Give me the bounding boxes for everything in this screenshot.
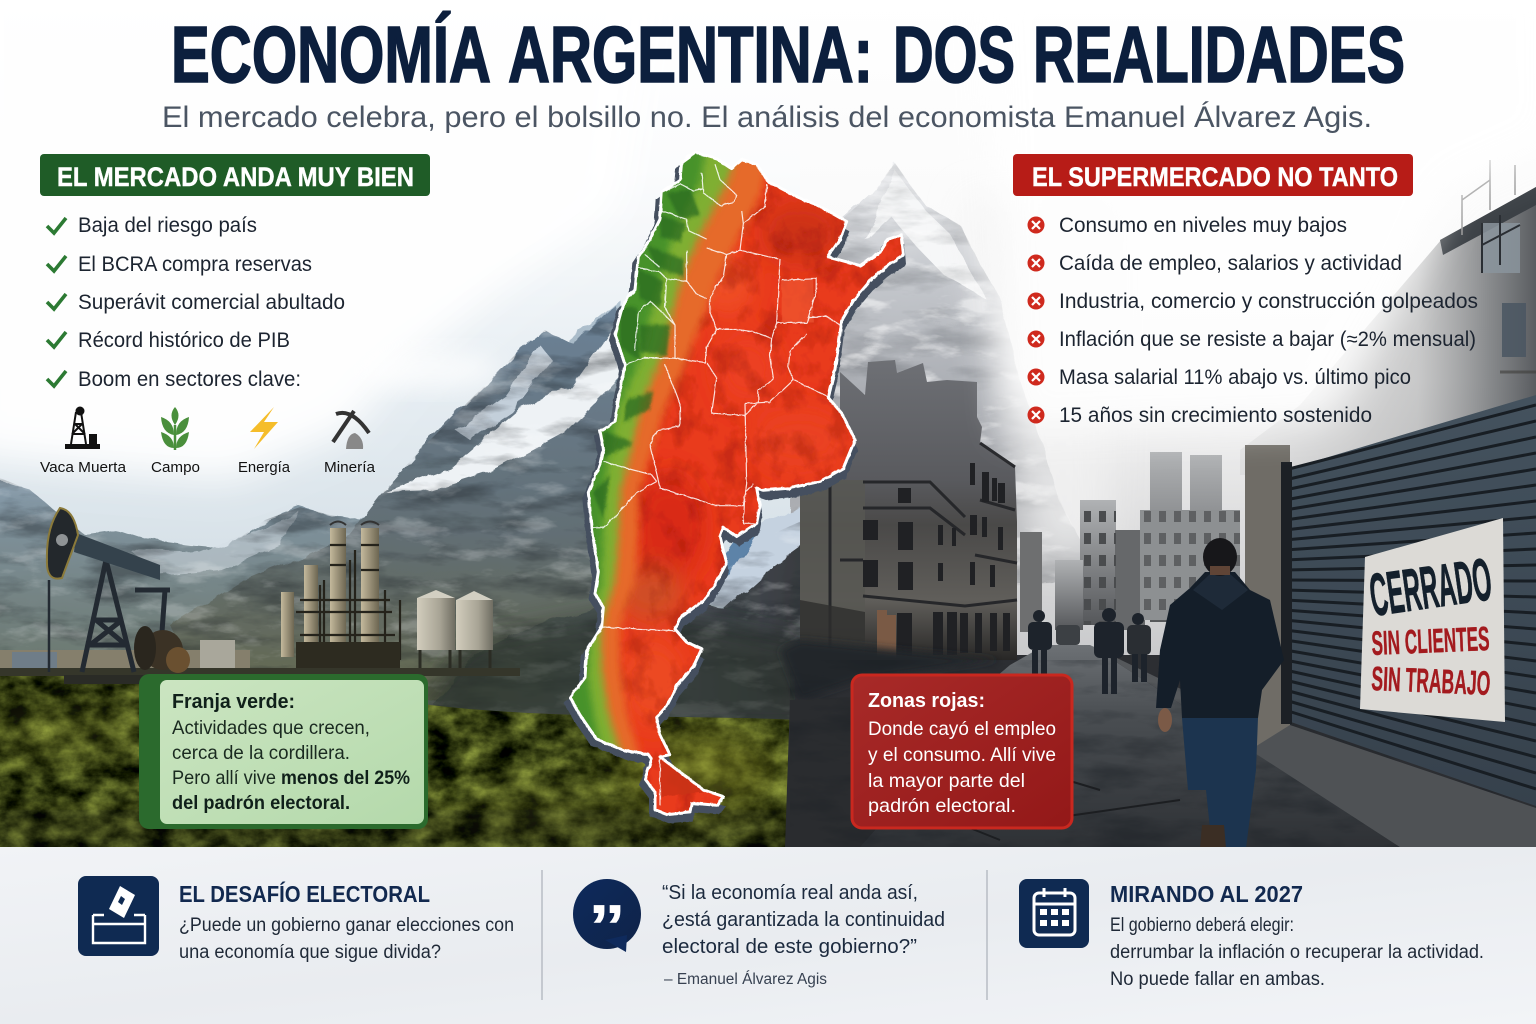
icon: quote bubble: ” xyxy=(588,893,626,962)
callout: zonas rojas: la mayor parte del xyxy=(868,770,1025,792)
heading: el mercado: EL MERCADO ANDA MUY BIEN xyxy=(57,162,414,192)
map of Argentina xyxy=(560,140,920,845)
distant buildings xyxy=(1020,452,1240,632)
map fill xyxy=(572,154,902,814)
item: masa salarial: Masa salarial 11% abajo vs. último pico xyxy=(1059,366,1411,389)
panel: market list xyxy=(40,154,430,476)
quote text: ¿está garantizada la continuidad xyxy=(662,909,945,931)
background scene xyxy=(0,160,1536,847)
text: desafío electoral: una economía que sigue divida? xyxy=(179,942,441,963)
callout: franja verde: menos del 25% xyxy=(281,767,410,789)
right peak xyxy=(790,163,1100,600)
olive ground xyxy=(0,676,790,847)
shutter wall xyxy=(1245,395,1536,847)
map outline xyxy=(570,152,903,814)
text: desafío electoral xyxy=(179,880,514,963)
lower slope shade xyxy=(400,610,810,730)
peak texture xyxy=(834,164,1075,585)
title xyxy=(171,10,1405,99)
city dark base xyxy=(795,655,1536,847)
callout: zonas rojas: y el consumo. Allí vive xyxy=(868,744,1056,766)
panel: supermarket list xyxy=(1013,154,1478,427)
item: BCRA: El BCRA compra reservas xyxy=(78,253,312,276)
street xyxy=(795,645,1400,847)
distant industrial buildings xyxy=(0,640,520,676)
item: riesgo país: Baja del riesgo país xyxy=(78,214,257,237)
cerrado sign xyxy=(1360,518,1505,722)
footer panel xyxy=(0,847,1536,1024)
icon: minería xyxy=(324,411,376,476)
icon: campo: Campo xyxy=(151,459,200,476)
text: mirando al 2027: MIRANDO AL 2027 xyxy=(1110,881,1303,907)
quote text: – Emanuel Álvarez Agis xyxy=(664,971,827,988)
item: empleo: Caída de empleo, salarios y actividad xyxy=(1059,252,1402,275)
main ruined building xyxy=(780,360,1017,700)
callout: franja verde: Franja verde: xyxy=(172,691,295,713)
title: ECONOMÍA xyxy=(171,10,491,99)
left far mountains xyxy=(0,300,640,720)
item: inflación: Inflación que se resiste a bajar (≈2% mensual) xyxy=(1059,328,1476,351)
callout: zonas rojas: Zonas rojas: xyxy=(868,690,985,712)
heading: el supermercado: EL SUPERMERCADO NO TANTO xyxy=(1032,162,1398,192)
text: mirando al 2027: El gobierno deberá elegir: xyxy=(1110,915,1294,936)
icon: campo xyxy=(151,407,200,476)
pumpjack xyxy=(47,508,190,684)
callout: franja verde: Actividades que crecen, xyxy=(172,717,370,739)
heading: el mercado xyxy=(40,154,430,196)
quote text xyxy=(662,882,945,988)
icon: quote bubble xyxy=(573,879,641,962)
item: PIB: Récord histórico de PIB xyxy=(78,329,290,352)
text: mirando al 2027: derrumbar la inflación o recuperar la actividad. xyxy=(1110,942,1484,963)
item: crecimiento: 15 años sin crecimiento sostenido xyxy=(1059,404,1372,427)
upper right building xyxy=(1240,160,1536,475)
icon: vaca muerta xyxy=(40,406,127,476)
icon: ballot box xyxy=(78,876,159,956)
icon: energía xyxy=(238,407,291,476)
main mountain range xyxy=(170,305,680,720)
text: desafío electoral: EL DESAFÍO ELECTORAL xyxy=(179,880,430,907)
callout: franja verde: cerca de la cordillera. xyxy=(172,742,350,764)
callout: zonas rojas: Donde cayó el empleo xyxy=(868,718,1056,740)
list haze right xyxy=(985,0,1536,430)
callout: franja verde: Pero allí vive xyxy=(172,767,276,789)
man walking xyxy=(1156,538,1284,848)
peak fog xyxy=(965,200,1110,560)
icon: energía: Energía xyxy=(238,459,291,476)
upper-left haze xyxy=(0,0,660,480)
title: ARGENTINA: xyxy=(508,10,873,99)
text: desafío electoral: ¿Puede un gobierno ganar elecciones con xyxy=(179,915,514,936)
callout: franja verde xyxy=(139,674,428,829)
quote text: electoral de este gobierno?” xyxy=(662,936,917,958)
text: mirando al 2027 xyxy=(1110,881,1484,990)
mountain texture xyxy=(0,300,830,730)
title: DOS xyxy=(893,10,1015,99)
callout: zonas rojas: padrón electoral. xyxy=(868,795,1016,817)
street texture xyxy=(868,660,1331,847)
quote text: “Si la economía real anda así, xyxy=(662,882,918,904)
item: consumo: Consumo en niveles muy bajos xyxy=(1059,214,1347,237)
icon: vaca muerta: Vaca Muerta xyxy=(40,459,127,476)
callout: franja verde: del padrón electoral. xyxy=(172,792,350,814)
refinery xyxy=(281,522,493,668)
item: boom: Boom en sectores clave: xyxy=(78,368,301,391)
callout: zonas rojas xyxy=(852,675,1072,828)
map shadow xyxy=(564,159,906,824)
province borders xyxy=(590,164,840,805)
heading: el supermercado xyxy=(1013,154,1413,196)
subtitle: El mercado celebra, pero el bolsillo no. El análisis del economista Emanuel Álvarez Agis. xyxy=(162,101,1372,134)
text: mirando al 2027: No puede fallar en ambas. xyxy=(1110,969,1325,990)
item: industria: Industria, comercio y construcción golpeados xyxy=(1059,290,1478,313)
pedestrians xyxy=(1028,608,1151,694)
icon: calendar xyxy=(1019,879,1089,948)
central lower mountain xyxy=(420,495,835,735)
icon: minería: Minería xyxy=(324,459,376,476)
item: superávit: Superávit comercial abultado xyxy=(78,291,345,314)
